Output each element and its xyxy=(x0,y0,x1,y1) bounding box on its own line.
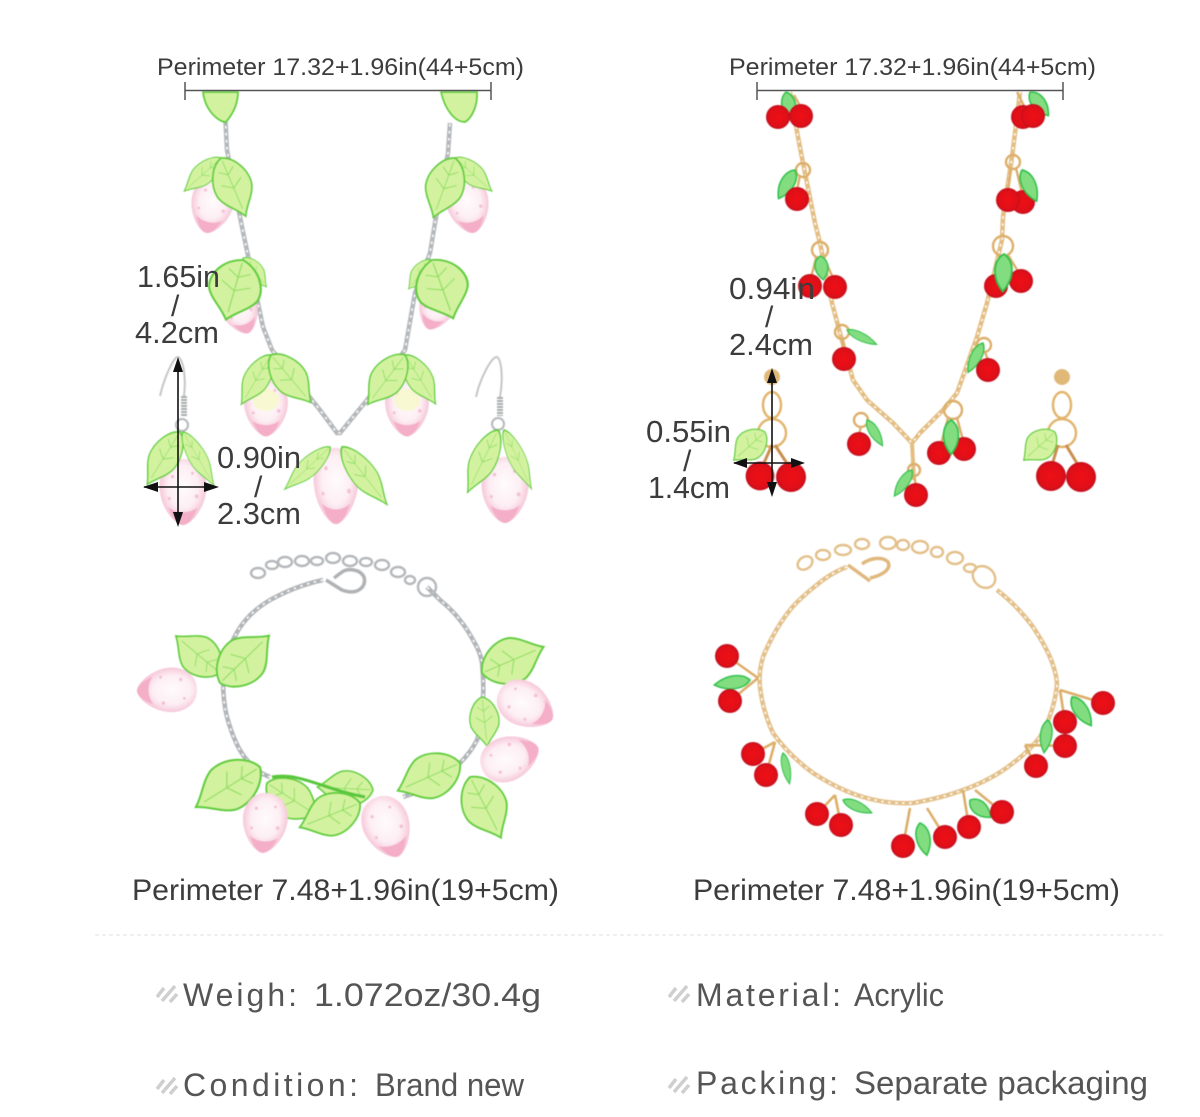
earring: right strawberry xyxy=(456,357,539,523)
strawberries: bracelet xyxy=(136,667,563,865)
spec: condition xyxy=(157,1067,525,1103)
leaves behind cherries: necklace xyxy=(773,88,1054,499)
top leaves xyxy=(203,92,477,122)
clasp xyxy=(848,558,889,581)
pendant: center xyxy=(278,439,397,524)
spec: packing: Separate packaging xyxy=(854,1065,1148,1101)
earring: right cherry xyxy=(1014,369,1096,492)
spec: condition: Brand new xyxy=(375,1067,525,1103)
cherries: necklace xyxy=(766,104,1045,507)
pendant: left 3 xyxy=(201,252,274,339)
earring size label: strawberry height: 1.65in xyxy=(137,259,220,294)
label: left necklace perimeter: Perimeter 17.32+1.96in(44+5cm) xyxy=(157,54,524,81)
rings and stems: cherry necklace xyxy=(780,92,1025,486)
necklace: strawberry xyxy=(135,92,539,525)
dimension line: left necklace xyxy=(185,82,491,100)
bracelet: strawberry xyxy=(136,553,563,865)
earring size label: cherry height xyxy=(729,271,815,362)
chain: strawberry bracelet xyxy=(223,580,483,797)
spec: material: Material: xyxy=(696,977,841,1013)
extender chain xyxy=(251,553,436,596)
spec: packing: Packing: xyxy=(696,1065,838,1101)
leaves over cherries: bracelet xyxy=(913,693,1097,857)
leaves: strawberry bracelet xyxy=(163,619,552,848)
earring size label: strawberry width: / xyxy=(254,471,263,504)
earring size label: cherry width: 0.55in xyxy=(646,414,731,449)
earring size label: strawberry width xyxy=(217,440,301,531)
label: cherry bracelet perimeter: Perimeter 7.48+1.96in(19+5cm) xyxy=(693,874,1120,907)
spec: weigh: 1.072oz/30.4g xyxy=(314,977,541,1013)
extender chain xyxy=(795,537,1000,592)
pendant: right 4 xyxy=(355,345,446,436)
earring size label: strawberry height xyxy=(135,259,220,350)
arrows: strawberry earring size xyxy=(143,357,219,527)
spec: material: Acrylic xyxy=(854,977,944,1013)
arrows: cherry earring size xyxy=(733,368,805,497)
earring size label: cherry width xyxy=(646,414,731,505)
earring size label: cherry width: / xyxy=(683,445,692,478)
earring size label: cherry height: / xyxy=(765,301,774,334)
leaves: cherry bracelet xyxy=(713,674,995,823)
earring: left cherry xyxy=(724,369,806,492)
spec: material xyxy=(669,977,944,1013)
pendant: right 2 xyxy=(416,150,499,237)
chain: strawberry necklace xyxy=(225,112,450,433)
earring size label: cherry width: 1.4cm xyxy=(648,470,730,505)
spec: weigh: Weigh: xyxy=(183,977,297,1013)
stems: cherry bracelet xyxy=(727,656,1103,846)
label: right necklace perimeter: Perimeter 17.32+1.96in(44+5cm) xyxy=(729,54,1096,81)
earring size label: strawberry width: 2.3cm xyxy=(217,496,301,531)
chain: cherry bracelet xyxy=(760,567,1057,803)
earring size label: strawberry height: 4.2cm xyxy=(135,315,219,350)
pendant: left 2 xyxy=(177,150,263,237)
cherries: bracelet xyxy=(715,644,1115,858)
spec: packing xyxy=(669,1065,1148,1101)
spec: weigh xyxy=(157,977,541,1013)
chain: cherry necklace xyxy=(790,92,1020,480)
leaves over cherries: necklace xyxy=(814,167,1043,454)
pendant: left 4 xyxy=(231,345,323,436)
earring size label: strawberry height: / xyxy=(171,290,180,323)
clasp xyxy=(326,570,365,592)
earring size label: cherry height: 0.94in xyxy=(729,271,815,306)
earring: left strawberry xyxy=(135,357,222,525)
earring size label: strawberry width: 0.90in xyxy=(217,440,301,475)
spec: condition: Condition: xyxy=(183,1067,358,1103)
necklace: cherry xyxy=(724,88,1096,507)
earring size label: cherry height: 2.4cm xyxy=(729,327,813,362)
bracelet: cherry xyxy=(713,537,1115,858)
dimension line: right necklace xyxy=(757,82,1063,100)
pendant: right 3 xyxy=(401,251,478,335)
label: strawberry bracelet perimeter: Perimeter 7.48+1.96in(19+5cm) xyxy=(132,874,559,907)
